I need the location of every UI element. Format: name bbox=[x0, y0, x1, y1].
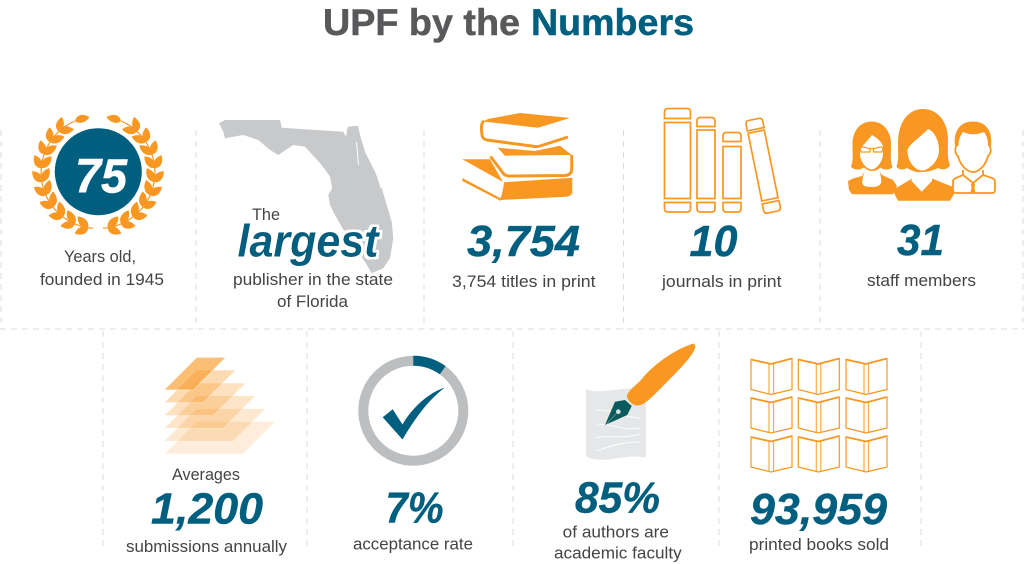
icon: stack of books bbox=[462, 113, 572, 201]
number: 85%: 85% bbox=[575, 474, 660, 523]
title: Numbers bbox=[531, 2, 694, 43]
number: 93,959: 93,959 bbox=[750, 485, 888, 534]
icon: pen on paper bbox=[586, 344, 695, 460]
text: of authors are academic faculty: academic faculty bbox=[554, 544, 682, 562]
text: publisher in the state of Florida bbox=[233, 271, 393, 311]
panel: staff members bbox=[848, 109, 995, 290]
text: years old bbox=[40, 248, 164, 289]
number: largest: largest bbox=[238, 216, 380, 266]
text: years old: Years old, bbox=[64, 248, 136, 266]
title: UPF by the bbox=[323, 2, 520, 43]
number: 7%: 7% bbox=[386, 484, 444, 533]
number: 10: 10 bbox=[690, 217, 738, 266]
text: journals in print: journals in print bbox=[661, 273, 782, 291]
icon: laurel wreath badge: 75 bbox=[75, 150, 128, 204]
icon: upright journals bbox=[664, 108, 781, 214]
panel: largest publisher in Florida bbox=[219, 120, 393, 311]
chart: acceptance ring with checkmark bbox=[363, 361, 463, 461]
text: acceptance rate: acceptance rate bbox=[353, 536, 473, 554]
text: The: The bbox=[252, 206, 280, 224]
icon: three people bbox=[848, 109, 995, 201]
text: averages: Averages bbox=[172, 466, 240, 484]
text: titles in print: 3,754 titles in print bbox=[452, 273, 596, 291]
number: 31: 31 bbox=[897, 216, 944, 265]
text: printed books sold: printed books sold bbox=[749, 536, 889, 554]
text: staff members: staff members bbox=[867, 272, 976, 290]
icon: grid of open books bbox=[751, 358, 887, 472]
icon: stacked sheets bbox=[164, 357, 276, 454]
icon: Florida map bbox=[219, 120, 393, 273]
text: of authors are academic faculty: of authors are bbox=[563, 524, 669, 542]
panel: authors bbox=[554, 344, 695, 562]
panel: titles in print bbox=[452, 113, 596, 291]
number: 1,200: 1,200 bbox=[151, 484, 264, 534]
text: publisher in the state of Florida: of Florida bbox=[277, 293, 349, 311]
panel: journals in print bbox=[661, 108, 782, 291]
text: years old: founded in 1945 bbox=[40, 271, 164, 289]
number: 3,754: 3,754 bbox=[467, 217, 580, 266]
panel: acceptance rate bbox=[353, 361, 473, 554]
panel: printed books sold bbox=[749, 358, 889, 554]
icon: laurel wreath badge bbox=[28, 113, 168, 240]
text: of authors are academic faculty bbox=[554, 524, 682, 562]
title bbox=[323, 2, 694, 43]
panel: 75 years old bbox=[28, 113, 168, 289]
panel: submissions bbox=[126, 357, 288, 556]
text: submissions annually: submissions annually bbox=[126, 538, 288, 556]
text: publisher in the state of Florida: publisher in the state bbox=[233, 271, 393, 289]
